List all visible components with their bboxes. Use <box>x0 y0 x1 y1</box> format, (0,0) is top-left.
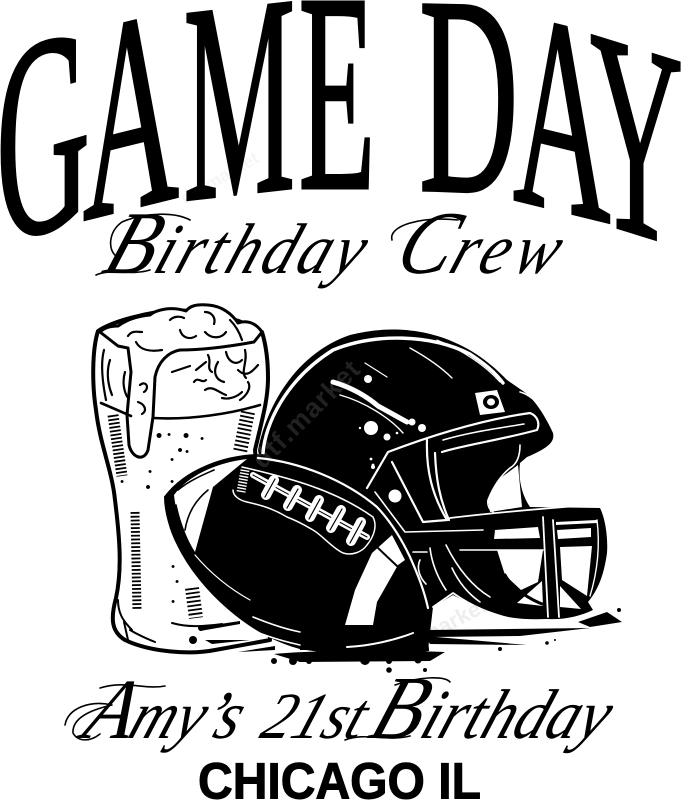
title: GAME DAY arched lettering <box>0 0 681 309</box>
paint splatter dots <box>359 375 426 502</box>
watermark: dtf.market: dtf.market <box>386 592 492 664</box>
ball lower highlights <box>195 555 413 647</box>
illustration: beer glass <box>93 305 270 652</box>
watermark: dtf.market: dtf.market <box>177 148 262 208</box>
ball left white panel <box>174 459 247 552</box>
subtitle: Birthday Crew script: Crew <box>385 195 586 293</box>
event line: Amy's 21st Birthday script <box>65 658 631 758</box>
watermark: dtf.market: dtf.market <box>246 354 367 474</box>
event line: Amy's 21st Birthday script: 21st <box>252 680 381 753</box>
illustration: football helmet <box>258 329 607 650</box>
foam curls <box>102 312 258 414</box>
band notch <box>378 548 397 566</box>
subtitle: Birthday Crew script: Birthday <box>93 195 389 293</box>
bubbles and hatching <box>113 412 248 642</box>
face mask windows <box>494 520 597 609</box>
glass outline <box>93 310 270 652</box>
ball body <box>165 455 428 654</box>
opening behind face mask <box>488 465 522 512</box>
foam head <box>100 305 262 457</box>
ball white band <box>345 535 405 625</box>
watermark: dtf.market <box>177 148 492 664</box>
event line: Amy's 21st Birthday script: Birthday <box>359 658 631 758</box>
panel lines <box>176 470 214 555</box>
beer level line <box>101 403 260 418</box>
helmet shell and face mask silhouette <box>258 329 607 650</box>
ball outline highlight <box>258 458 428 608</box>
helmet snap <box>475 390 505 415</box>
ground splatter <box>189 608 622 673</box>
laces <box>233 467 375 554</box>
helmet highlights <box>263 338 598 624</box>
illustration: football <box>165 455 428 654</box>
subtitle: Birthday Crew script <box>93 195 586 293</box>
event line: Amy's 21st Birthday script: Amy’s <box>68 662 262 757</box>
black bar inside window <box>505 575 545 605</box>
